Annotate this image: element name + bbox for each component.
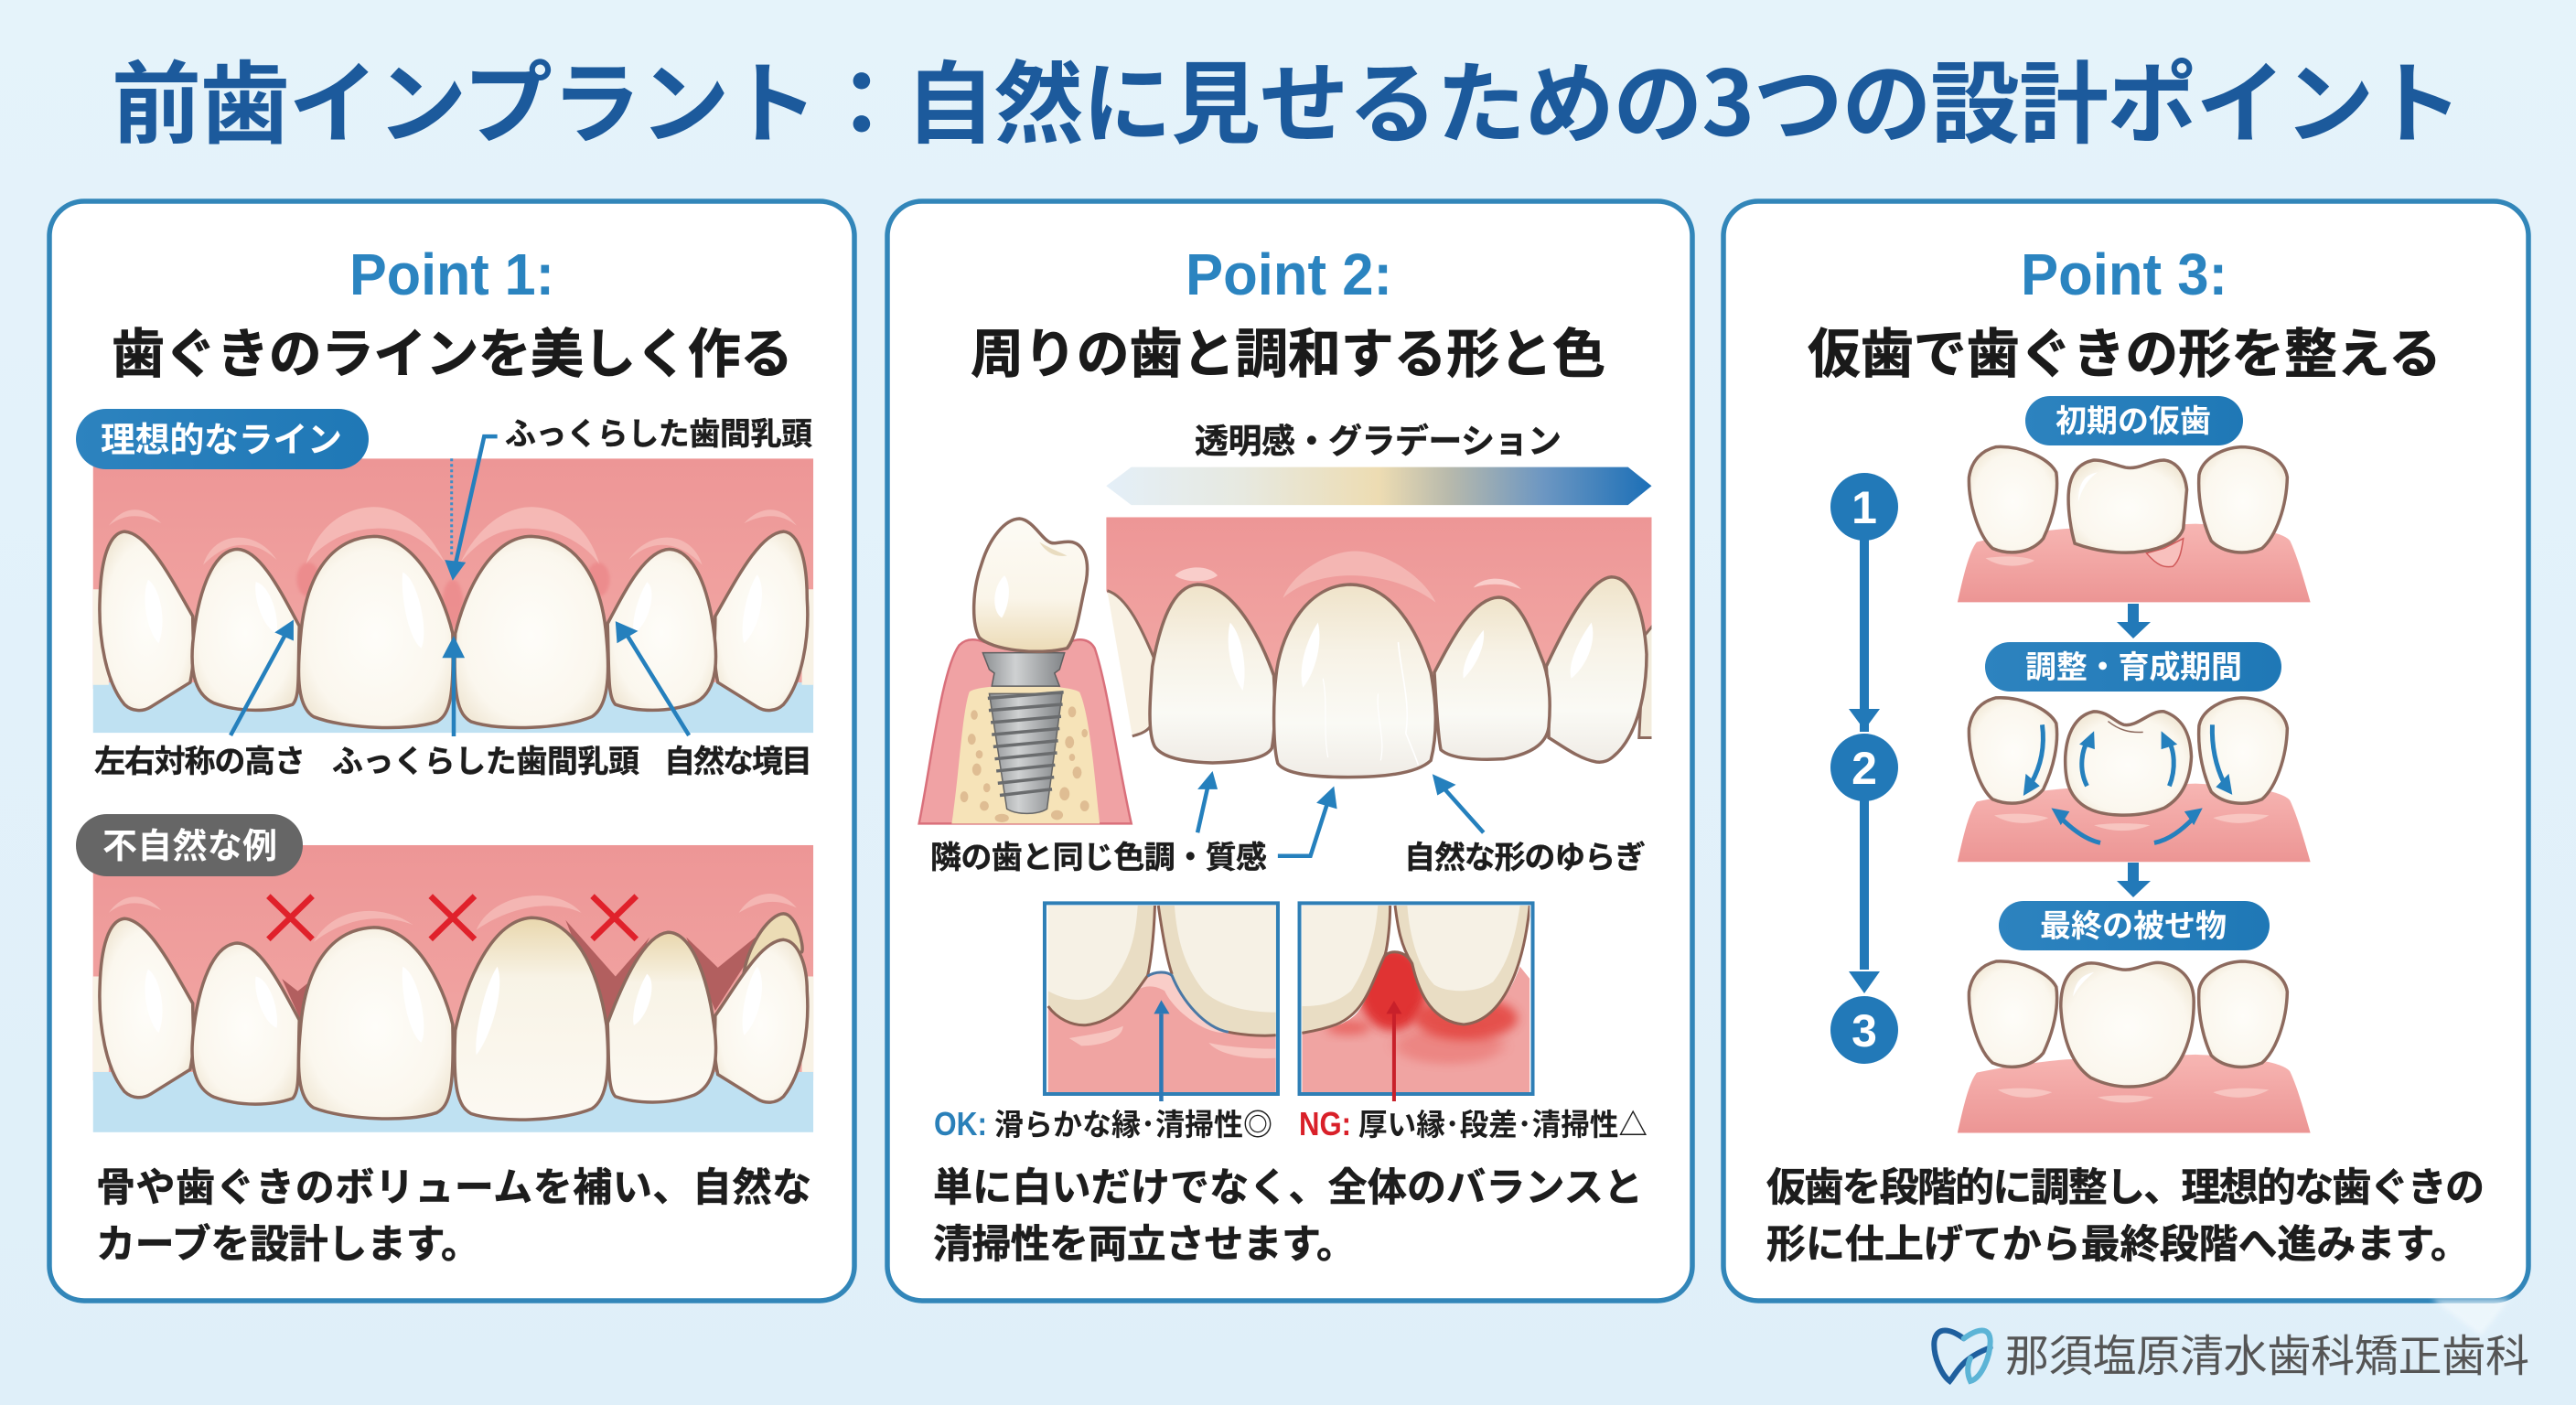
illustration: NG margin (1300, 903, 1533, 1101)
illustration: ideal gum line (93, 436, 818, 736)
arrows: tissue shaping (2031, 724, 2224, 842)
illustration: unnatural example (93, 845, 818, 1132)
label: same color and texture: 隣の歯と同じ色調・質感 (930, 841, 1267, 875)
arrows: ideal line callouts (231, 436, 689, 736)
badge: ideal line (76, 409, 369, 469)
label: OK: OK: (934, 1105, 987, 1142)
description: point 3: 形に仕上げてから最終段階へ進みます。 (1766, 1223, 2470, 1267)
heading: Point 1: Point 1: (349, 241, 554, 307)
logo: clinic tooth mark and name: 那須塩原清水歯科矯正歯科 (2005, 1333, 2529, 1381)
label: papilla top: ふっくらした歯間乳頭 (505, 417, 812, 452)
description: point 3 (1766, 1166, 2485, 1267)
label: papilla bottom: ふっくらした歯間乳頭 (332, 745, 639, 779)
badge: initial provisional (2025, 396, 2243, 445)
illustration: initial provisional (1958, 446, 2311, 602)
subheading: 仮歯で歯ぐきの形を整える (1808, 325, 2442, 384)
label: NG: NG: (1299, 1105, 1351, 1142)
arrow: step 2 to 3 (2117, 863, 2151, 897)
description: point 1: 骨や歯ぐきのボリュームを補い、自然な (96, 1166, 811, 1210)
timeline: steps 1 to 3 (1830, 473, 1898, 1064)
timeline: steps 1 to 3: 2 (1852, 743, 1877, 794)
illustration: OK margin (1045, 903, 1278, 1101)
label: natural border: 自然な境目 (664, 745, 812, 779)
subheading: 周りの歯と調和する形と色 (971, 325, 1605, 384)
gradient bar (1106, 467, 1651, 505)
heading: Point 3: Point 3: (2021, 241, 2227, 307)
description: point 2: 清掃性を両立させます。 (933, 1223, 1356, 1267)
badge: final crown (1999, 901, 2270, 950)
label: OK: 滑らかな縁･清掃性◎ (994, 1100, 1272, 1144)
timeline: steps 1 to 3: 1 (1852, 482, 1877, 533)
arrows: harmony callouts (1197, 771, 1484, 856)
implant cross section (919, 519, 1132, 823)
watermark glow (2431, 1299, 2510, 1335)
arrow: NG (1386, 1001, 1401, 1101)
badge: initial provisional: 初期の仮歯 (2055, 404, 2211, 439)
panel: point 2 card (887, 201, 1692, 1301)
heading: Point 2: Point 2: (1186, 241, 1392, 307)
illustration: harmonised teeth and implant (919, 467, 1654, 856)
arrow: step 1 to 2 (2117, 604, 2151, 638)
label: NG: 厚い縁･段差･清掃性△ (1358, 1100, 1648, 1144)
badge: adjustment period (1985, 642, 2281, 692)
illustration: final crown (1958, 961, 2311, 1133)
badge: adjustment period: 調整・育成期間 (2025, 650, 2242, 685)
gum and teeth row (1106, 517, 1654, 778)
description: point 2: 単に白いだけでなく、全体のバランスと (933, 1166, 1643, 1210)
title: 前歯インプラント：自然に見せるための3つの設計ポイント (112, 32, 2463, 162)
panel: point 3 card (1723, 201, 2528, 1301)
marks: red crosses (268, 896, 637, 939)
illustration: adjustment period (1958, 698, 2311, 862)
label: symmetric height: 左右対称の高さ (94, 745, 306, 779)
description: point 1: カーブを設計します。 (96, 1223, 480, 1267)
subheading: 歯ぐきのラインを美しく作る (112, 325, 793, 384)
arrow: OK (1154, 1000, 1170, 1101)
badge: final crown: 最終の被せ物 (2040, 909, 2227, 944)
badge: unnatural example: 不自然な例 (102, 828, 277, 866)
panel: point 1 card (49, 201, 854, 1301)
timeline: steps 1 to 3: 3 (1852, 1005, 1877, 1056)
description: point 3: 仮歯を段階的に調整し、理想的な歯ぐきの (1766, 1166, 2485, 1210)
badge: ideal line: 理想的なライン (101, 422, 342, 460)
label: natural shape variation: 自然な形のゆらぎ (1404, 841, 1646, 875)
description: point 2 (933, 1166, 1643, 1267)
badge: unnatural example (76, 814, 303, 876)
label: translucency gradation: 透明感・グラデーション (1195, 422, 1562, 460)
description: point 1 (96, 1166, 811, 1267)
